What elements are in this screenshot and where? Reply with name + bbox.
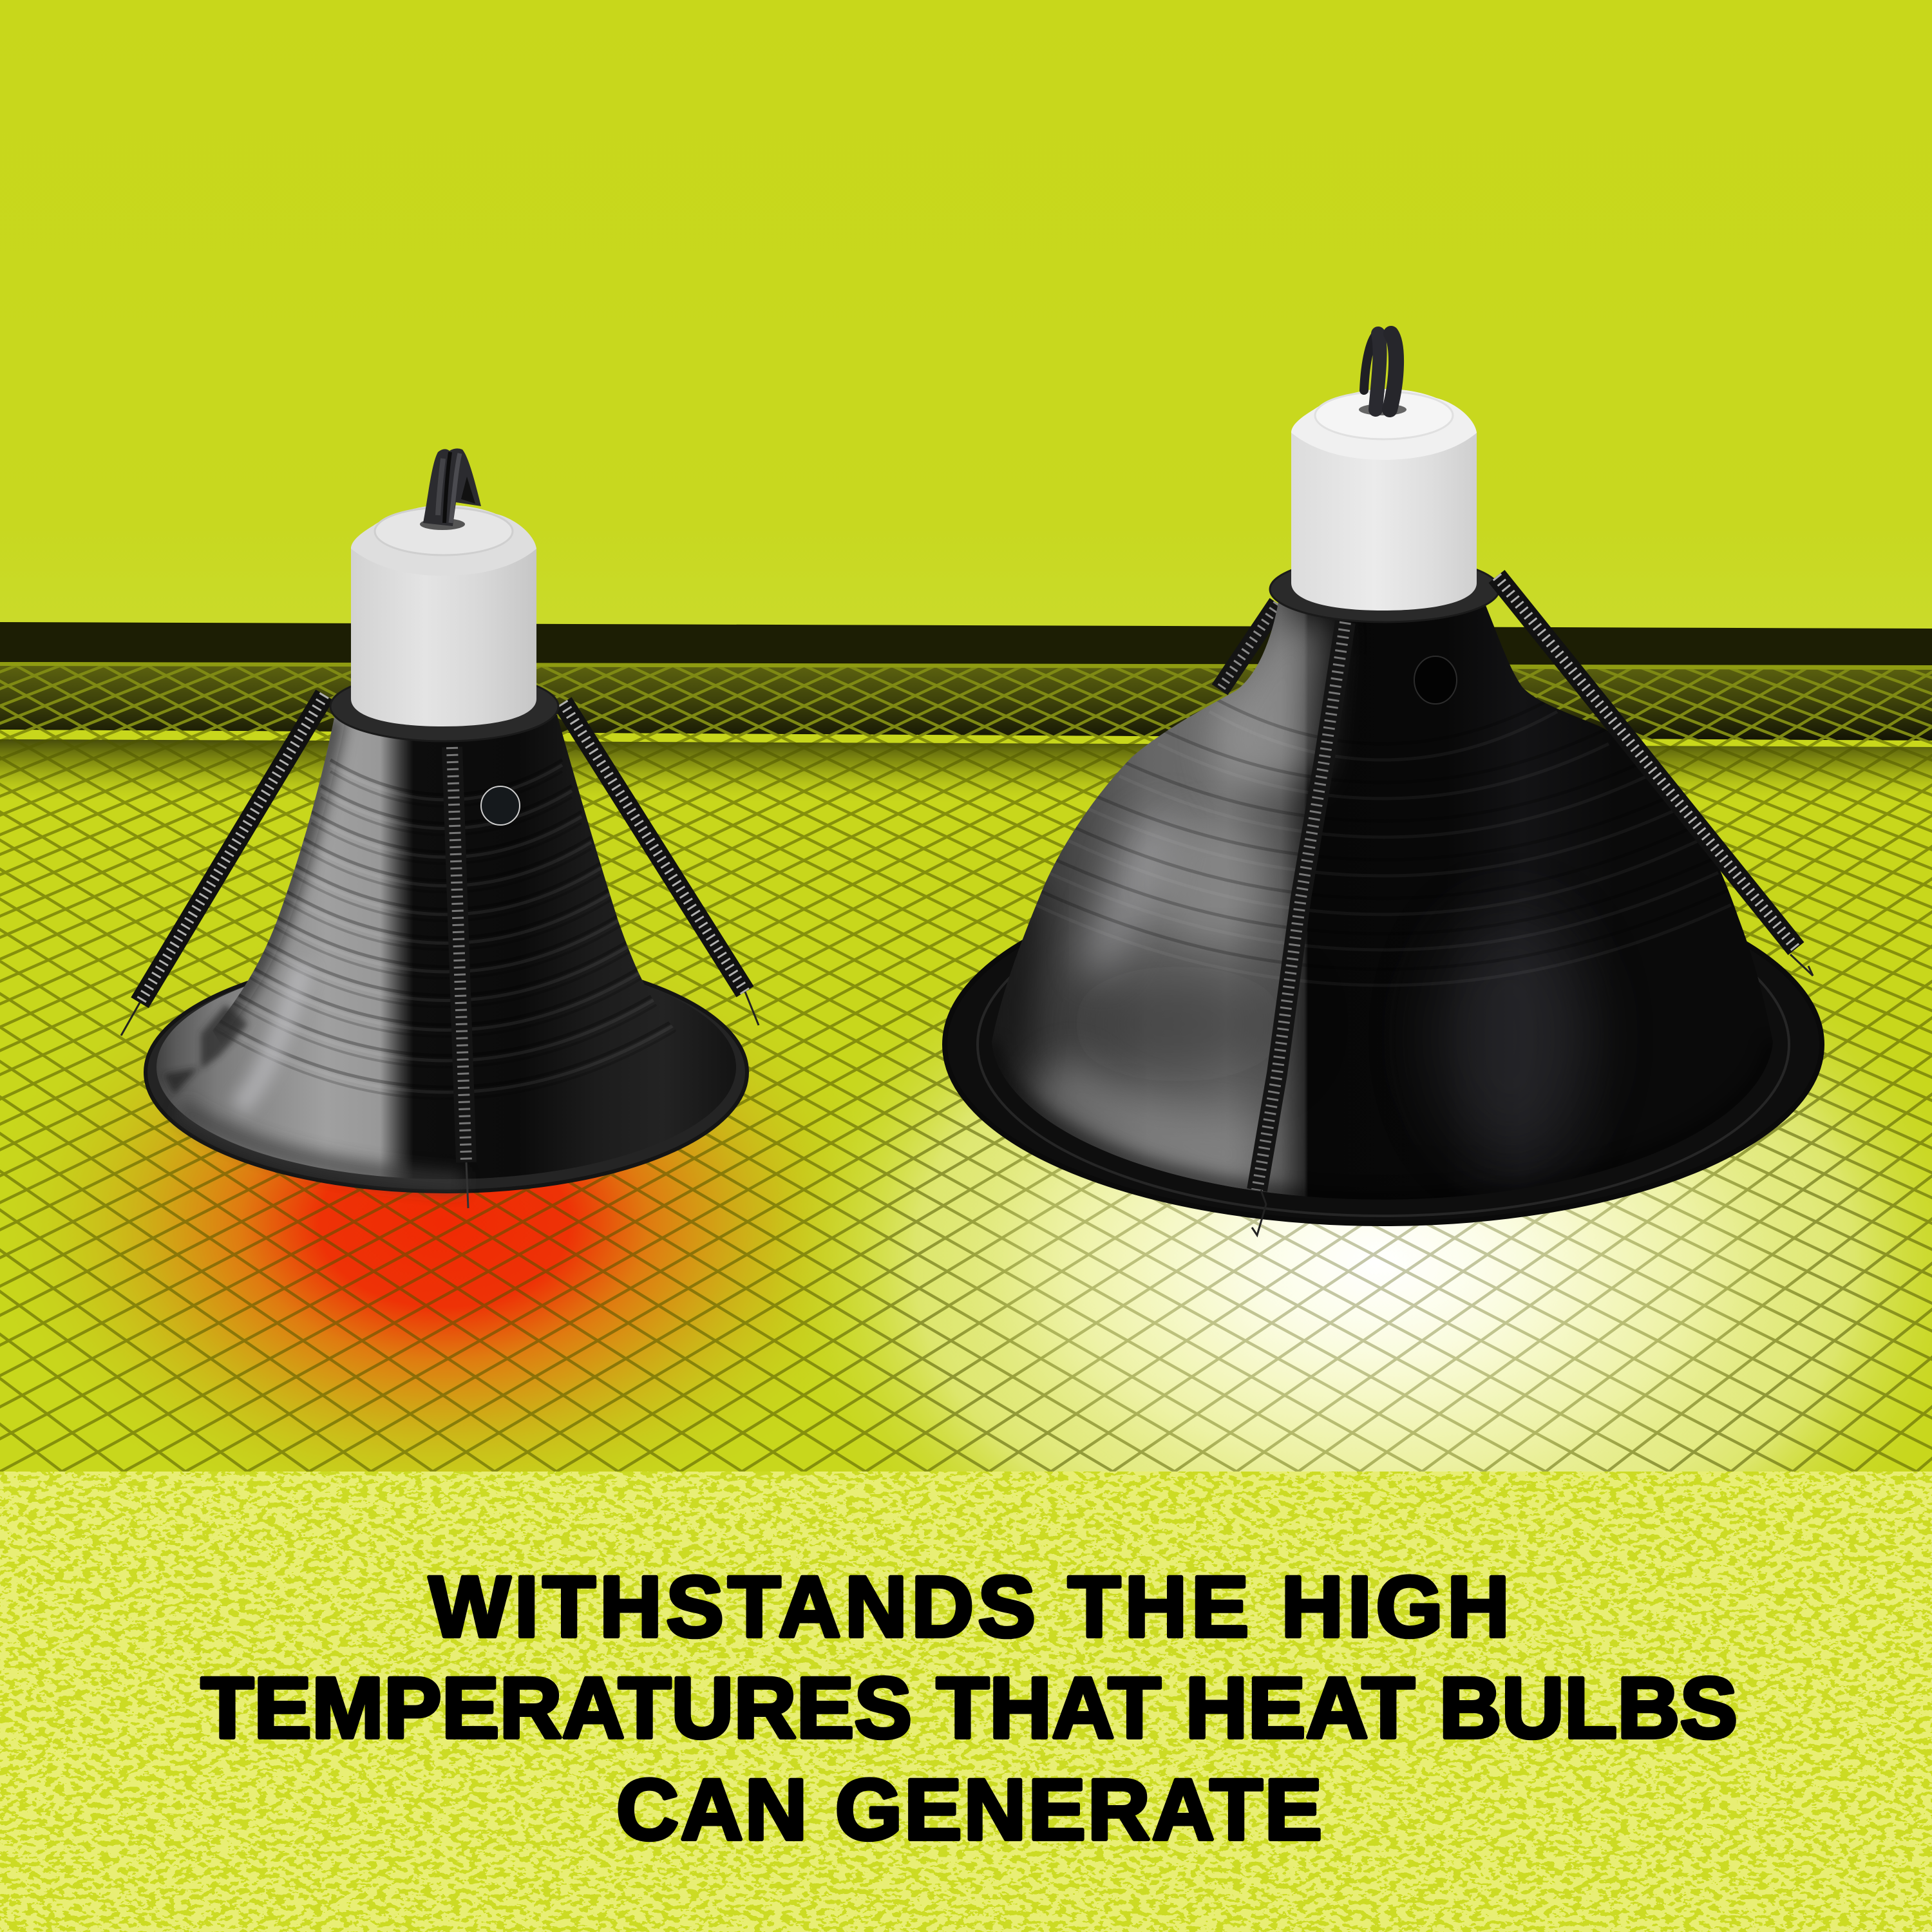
left lamp vent hole bbox=[481, 786, 520, 825]
backdrop wall bbox=[0, 0, 1932, 644]
heat glow: red bbox=[50, 1051, 826, 1472]
wire mesh bbox=[0, 730, 1932, 1472]
left lamp base rim bbox=[146, 953, 747, 1191]
right lamp highlights and ribs bbox=[992, 618, 1773, 1200]
mesh floor bbox=[0, 730, 1932, 1472]
light bloom over the mesh bbox=[962, 1146, 1785, 1472]
right lamp dome body bbox=[992, 602, 1773, 1200]
right lamp base rim bbox=[945, 866, 1822, 1224]
upper mesh wall bbox=[0, 666, 1932, 741]
headline: CAN GENERATE bbox=[616, 1762, 1322, 1858]
left lamp ceramic socket bbox=[351, 505, 536, 726]
right lamp ceramic socket bbox=[1291, 389, 1477, 611]
left lamp saucer bbox=[156, 955, 736, 1179]
left lamp: infrared bbox=[121, 448, 759, 1208]
left lamp front spring bbox=[452, 747, 468, 1208]
left lamp bell body bbox=[213, 715, 676, 1130]
right lamp flange bbox=[1270, 556, 1499, 622]
floor shadow at back bbox=[0, 739, 1932, 791]
headline bbox=[201, 1559, 1738, 1858]
cage rim highlight bbox=[0, 662, 1932, 670]
left lamp saucer shading bbox=[164, 966, 464, 1182]
right lamp front spring bbox=[1252, 622, 1345, 1235]
left lamp ribs and folds bbox=[213, 715, 678, 1099]
left lamp cord bbox=[423, 448, 481, 526]
caption band with texture bbox=[0, 1472, 1932, 1932]
headline: WITHSTANDS THE HIGH bbox=[429, 1559, 1510, 1655]
right lamp vent hole bbox=[1414, 656, 1457, 704]
right lamp: basking light bbox=[945, 332, 1822, 1235]
right lamp back spring bbox=[1220, 603, 1278, 690]
left lamp left spring bbox=[121, 695, 325, 1036]
light glow: white bbox=[813, 1015, 1932, 1472]
right lamp right spring bbox=[1497, 576, 1813, 976]
left lamp right spring bbox=[563, 703, 759, 1025]
back edge bar of the cage bbox=[0, 622, 1932, 666]
right lamp inner rim ring bbox=[978, 873, 1789, 1216]
left lamp flange bbox=[330, 672, 558, 741]
headline: TEMPERATURES THAT HEAT BULBS bbox=[201, 1660, 1738, 1756]
right lamp cord bbox=[1364, 332, 1396, 410]
